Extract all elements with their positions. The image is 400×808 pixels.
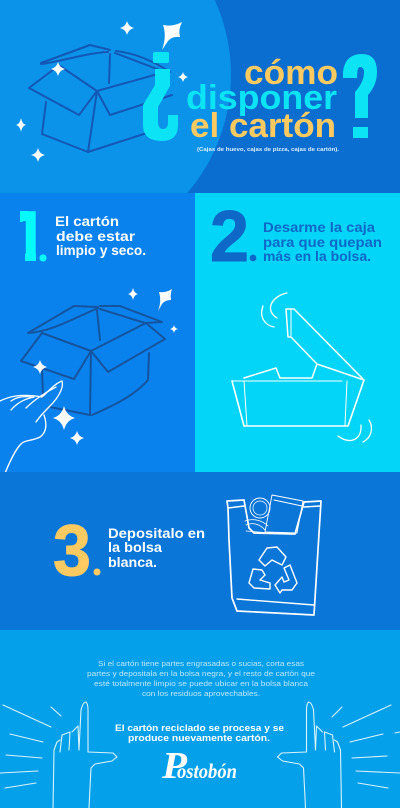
step 3 text: Depositalo en [108, 525, 205, 541]
text: recycling message: El cartón reciclado se procesa y se [115, 722, 284, 733]
title: cómo disponer el cartón: disponer [186, 79, 337, 117]
icon: inverted question mark [143, 52, 178, 141]
step 2 text: más en la bolsa. [263, 248, 371, 264]
step 2 text [263, 219, 382, 264]
icon: motion swirls [262, 293, 371, 442]
step 1 text: El cartón [55, 213, 119, 229]
step 3 text: la bolsa [108, 539, 162, 555]
text: disposal note [87, 659, 315, 698]
icon: pointing hand [0, 381, 62, 486]
text: disposal note: esté totalmente limpio se puede ubicar en la bolsa blanca [94, 679, 309, 688]
step 2 text: Desarme la caja [263, 219, 375, 235]
step 1 number [20, 211, 47, 262]
step 3 text: blanca. [108, 554, 157, 570]
step 1 text: debe estar [56, 228, 136, 244]
icon: flattened box [232, 309, 364, 426]
icon: white bag with recycling symbol [227, 495, 321, 615]
panel: step 1 [0, 193, 195, 486]
logo: Postobón: ostobón [177, 759, 237, 783]
icon: right hand with rays [278, 702, 400, 808]
icon: clean box [21, 306, 165, 415]
step 3 text [108, 525, 205, 570]
step 1 number: 1 [9, 197, 49, 277]
step 1 text [55, 213, 146, 258]
icon: sparkles [33, 288, 178, 445]
text: recycling message: produce nuevamente cartón. [128, 732, 270, 743]
step 1 text: limpio y seco. [56, 242, 146, 258]
panel: step 3 [0, 472, 400, 630]
subtitle: (Cajas de huevo, cajas de pizza, cajas de cartón). [197, 147, 340, 153]
logo: Postobón [161, 745, 237, 787]
step 3 number: 3 [53, 511, 91, 591]
panel: header [0, 0, 377, 193]
text: recycling message [115, 722, 284, 743]
step 2 number: 2 [210, 197, 249, 277]
step 2 text: para que quepan [263, 234, 382, 250]
icon: question mark [343, 54, 377, 138]
icon: sparkles [16, 21, 188, 162]
title: cómo disponer el cartón: cómo [244, 54, 338, 92]
text: disposal note: Si el cartón tiene partes engrasadas o sucias, corta esas [98, 659, 304, 668]
panel: step 2 [195, 193, 400, 472]
text: disposal note: partes y depositala en la bolsa negra, y el resto de cartón que [87, 669, 315, 678]
logo: Postobón: P [161, 745, 188, 787]
icon: left hand with rays [0, 702, 117, 808]
icon: recycling arrows [249, 547, 297, 593]
text: disposal note: con los residuos aprovechables. [142, 689, 260, 698]
icon: open cardboard box [29, 45, 172, 152]
title: cómo disponer el cartón [186, 54, 338, 145]
title: cómo disponer el cartón: el cartón [190, 107, 336, 145]
panel: closing note [0, 630, 400, 808]
